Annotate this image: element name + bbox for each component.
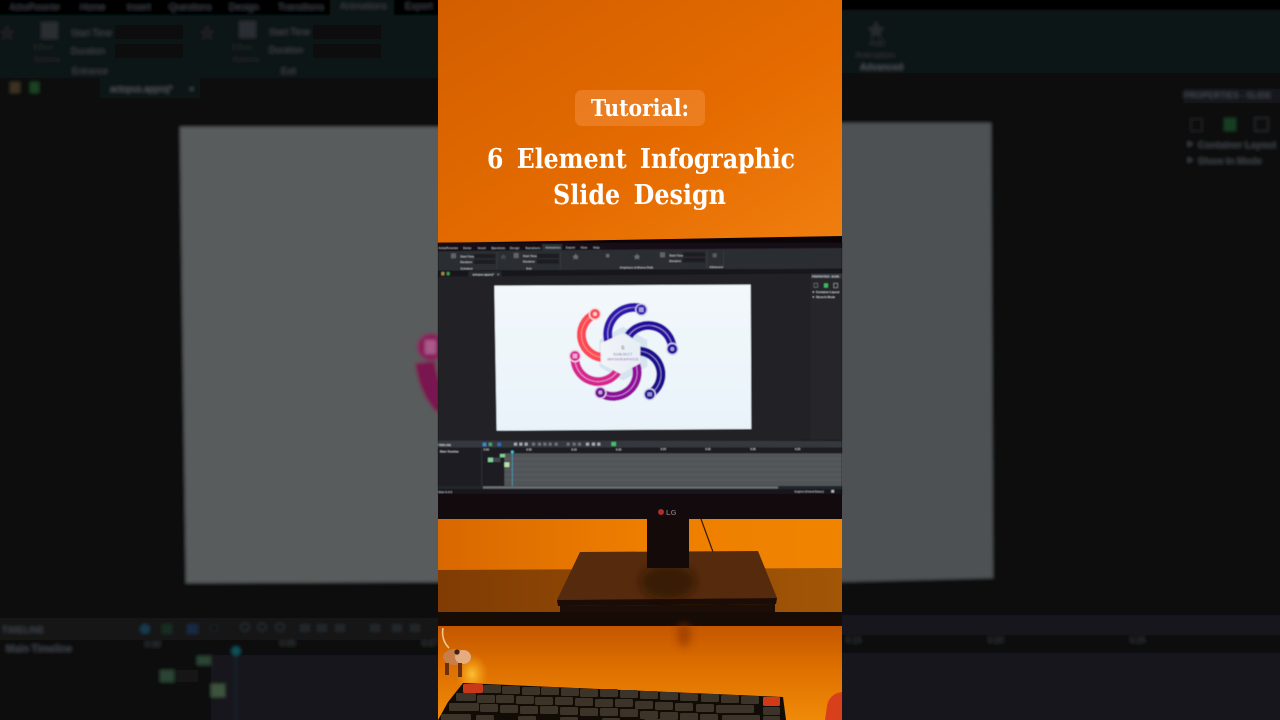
ribbon: advanced: Add — [869, 38, 885, 48]
menu bar: ActivePresenter — [439, 246, 459, 250]
shelf edge — [438, 604, 842, 626]
arc: purple — [595, 364, 637, 398]
properties side panel: PROPERTIES - SLIDE — [812, 274, 840, 278]
menu bar: Animations — [545, 246, 561, 250]
dim timeline: 0:25 — [1130, 636, 1146, 645]
arc: red — [581, 308, 606, 357]
monitor — [438, 236, 842, 519]
ribbon: entrance and exit — [0, 15, 442, 78]
desk — [438, 623, 842, 720]
ribbon: Duration — [460, 260, 472, 264]
title: 6 Element Infographic — [487, 143, 795, 175]
red object at desk edge — [825, 692, 842, 720]
properties side panel: Show In Mode — [816, 295, 835, 299]
properties panel: Show In Mode — [1198, 156, 1262, 167]
menu bar: Help — [593, 246, 600, 250]
properties side panel — [810, 273, 842, 440]
dim timeline toolbar: TIMELINE — [2, 625, 44, 635]
monitor bezel — [438, 236, 842, 519]
keyboard row 3 — [449, 703, 780, 720]
menu bar: Design — [510, 246, 520, 250]
ribbon — [438, 248, 842, 271]
timeline toolbar: TIMELINE — [438, 443, 451, 447]
ribbon: entrance and exit: Duration — [71, 46, 105, 56]
ribbon: entrance and exit: Entrance — [72, 66, 108, 76]
hub hexagon: SUBJECT — [613, 353, 633, 357]
lower bezel — [438, 494, 842, 519]
top menu bar: Questions — [169, 2, 212, 13]
keyboard row 1 — [463, 684, 780, 706]
hub hexagon: INFOGRAPHICS — [607, 358, 639, 362]
scrollbar and status bar: English (United States) — [795, 489, 824, 493]
dim timeline: 0:20 — [988, 636, 1004, 645]
figurine: cat — [443, 628, 471, 677]
LG logo: LG — [666, 508, 677, 517]
scrollbar and status bar — [438, 486, 842, 494]
keyboard row 2 — [456, 693, 780, 715]
slide — [494, 285, 751, 431]
panel: blurred left background — [0, 0, 446, 720]
monitor stand base — [557, 551, 777, 606]
ribbon: Duration — [669, 259, 681, 263]
top menu bar: Insert — [127, 2, 151, 13]
shelf surface — [438, 568, 842, 614]
menu bar — [438, 243, 842, 251]
ribbon: Advanced — [709, 265, 723, 269]
menu bar: Questions — [491, 246, 506, 250]
ribbon: entrance and exit: Start Time — [269, 27, 310, 37]
menu bar: View — [581, 246, 588, 250]
panel: orange title backdrop — [438, 0, 842, 244]
ribbon: Start Time — [460, 254, 475, 258]
timeline tracks: 0:00 — [484, 447, 490, 451]
ribbon: advanced — [838, 10, 1280, 73]
dim timeline: 0:15 — [846, 636, 862, 645]
scrollbar and status bar: Slide 3 of 3 — [438, 490, 453, 494]
ribbon: entrance and exit: Effect — [33, 43, 54, 52]
menu bar: Export — [566, 246, 575, 250]
ribbon: entrance and exit: Duration — [269, 45, 303, 55]
keyboard row 4 — [441, 714, 662, 720]
tab strip: × — [497, 272, 499, 276]
ribbon: Emphasis & Motion Path — [620, 266, 653, 270]
timeline tracks: 0:20 — [661, 447, 667, 451]
application screen — [438, 243, 842, 494]
document tab: × — [189, 84, 194, 94]
dim timeline tracks — [0, 639, 444, 720]
tutorial label — [575, 90, 705, 126]
ribbon: Entrance — [461, 267, 473, 271]
arc: indigo top — [608, 304, 647, 341]
title — [487, 143, 795, 211]
tutorial label: Tutorial: — [591, 95, 689, 122]
properties panel — [1181, 88, 1280, 720]
cable — [701, 519, 713, 552]
tab strip — [438, 269, 842, 277]
timeline tracks: 0:10 — [571, 447, 577, 451]
dim timeline tracks: 0:00 — [145, 640, 161, 649]
ribbon: Start Time — [523, 254, 537, 258]
top menu bar: Home — [80, 2, 105, 13]
timeline toolbar — [438, 441, 842, 448]
dim timeline tracks: 0:05 — [280, 639, 296, 648]
keyboard — [438, 683, 786, 720]
top menu bar: Export — [405, 1, 433, 12]
properties side panel: Container Layout — [816, 290, 839, 294]
ribbon: advanced: Advanced — [860, 62, 903, 72]
panel: blurred right background — [838, 0, 1280, 720]
tab strip: actopus.approj* — [473, 272, 495, 276]
timeline tracks: Main Timeline — [440, 449, 459, 453]
ribbon: entrance and exit: Options — [232, 55, 260, 64]
timeline tracks: 0:15 — [616, 447, 622, 451]
wall behind monitor — [438, 510, 842, 572]
dim timeline toolbar — [0, 618, 442, 640]
hub hexagon — [601, 333, 640, 374]
dim infographic icon — [416, 332, 446, 406]
top menu bar: Transitions — [278, 2, 324, 13]
top menu bar: Animations — [340, 1, 387, 12]
ribbon: Start Time — [669, 253, 684, 257]
arc: navy lower right — [639, 351, 661, 400]
top bar — [838, 0, 1280, 10]
menu bar: Home — [463, 246, 472, 250]
timeline tracks: 0:25 — [705, 447, 711, 451]
ribbon: Duration — [523, 260, 535, 264]
canvas area — [438, 273, 842, 442]
top menu bar — [0, 0, 442, 15]
hub hexagon: 6 — [621, 345, 625, 351]
properties panel: PROPERTIES - SLIDE — [1184, 90, 1272, 100]
dim timeline tracks: 0:07 — [422, 639, 438, 648]
dim timeline tracks: Main Timeline — [6, 644, 72, 655]
top menu bar: ActivePresenter — [10, 2, 60, 13]
arc: magenta — [569, 350, 618, 382]
dim timeline — [838, 615, 1280, 720]
ribbon: advanced: Animation — [855, 50, 895, 60]
arc: indigo right — [629, 325, 678, 355]
top menu bar: Design — [229, 2, 259, 13]
hub backing hexagon — [599, 327, 647, 381]
infographic: six arcs around hub — [569, 304, 678, 400]
timeline tracks — [438, 447, 842, 486]
timeline tracks: 0:35 — [795, 447, 801, 451]
monitor stand neck — [647, 518, 689, 568]
ribbon: entrance and exit: Options — [33, 55, 61, 64]
ribbon: entrance and exit: Start Time — [71, 28, 112, 38]
document tab — [0, 78, 442, 98]
LG logo — [658, 508, 677, 517]
document tab: actopus.approj* — [110, 84, 173, 94]
ribbon: Exit — [526, 266, 532, 270]
title: Slide Design — [553, 179, 726, 211]
menu bar: Insert — [478, 246, 486, 250]
menu bar: Transitions — [525, 246, 541, 250]
dim slide — [838, 123, 993, 582]
timeline tracks: 0:30 — [750, 447, 756, 451]
properties panel: Container Layout — [1198, 140, 1277, 151]
ribbon: entrance and exit: Effect — [232, 43, 253, 52]
dim slide — [180, 127, 444, 583]
ribbon: entrance and exit: Exit — [281, 66, 297, 76]
timeline tracks: 0:05 — [526, 447, 532, 451]
